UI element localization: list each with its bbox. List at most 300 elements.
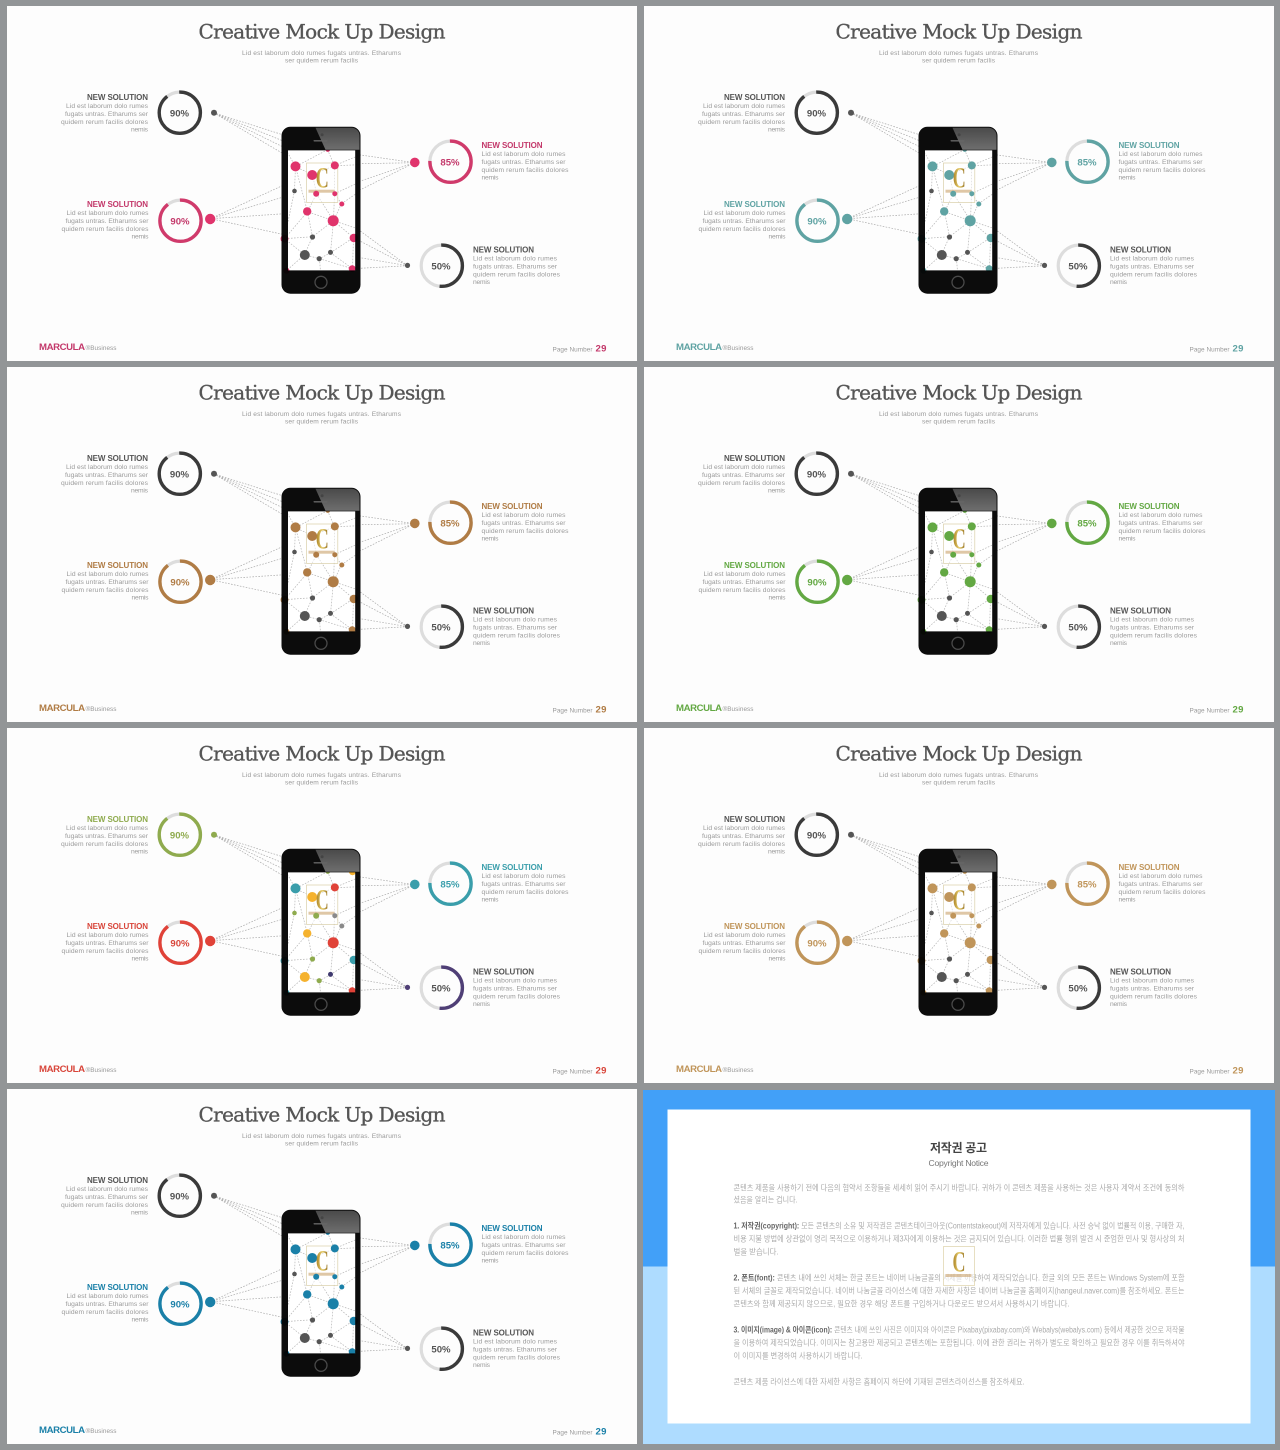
stat: right top 85%: fugats untras. Etharums ser xyxy=(1118,159,1203,166)
copyright subtitle: Copyright Notice xyxy=(928,1158,988,1168)
subtitle xyxy=(878,772,1038,787)
stat: bottom left 90%: Lid est laborum dolo rumes xyxy=(703,210,786,217)
stat: right bottom 50%: fugats untras. Etharums ser xyxy=(472,264,557,271)
page number: 29 xyxy=(595,705,606,716)
stat: bottom left 90%: Lid est laborum dolo rumes xyxy=(66,210,149,217)
stat: bottom left 90% xyxy=(698,922,852,964)
footer brand xyxy=(676,1064,753,1075)
stat: top left 90%: Lid est laborum dolo rumes xyxy=(702,103,785,110)
stat: right bottom 50%: NEW SOLUTION xyxy=(472,607,534,616)
footer brand: ®Business xyxy=(85,1066,116,1074)
subtitle: Lid est laborum dolo rumes fugats untras. Etharums xyxy=(242,50,401,57)
footer brand xyxy=(38,703,116,714)
subtitle: ser quidem rerum facilis xyxy=(284,419,358,426)
page number xyxy=(1189,705,1243,716)
stat: top left 90%: quidem rerum facilis dolores xyxy=(698,841,785,848)
title: Creative Mock Up Design xyxy=(198,1103,445,1127)
stat: right top 85%: 85% xyxy=(1077,158,1097,169)
phone mockup xyxy=(280,849,360,1016)
stat: bottom left 90%: 90% xyxy=(170,1300,190,1311)
stat: bottom left 90%: fugats untras. Etharums ser xyxy=(65,218,149,225)
page number: 29 xyxy=(595,1066,606,1077)
panel: slide 5 multicolour xyxy=(6,728,637,1083)
stat: top left 90%: NEW SOLUTION xyxy=(86,93,148,102)
stat: right bottom 50%: Lid est laborum dolo rumes xyxy=(1110,256,1194,263)
network wires xyxy=(847,835,1051,991)
stat: right top 85%: fugats untras. Etharums ser xyxy=(481,159,566,166)
stat: right top 85%: NEW SOLUTION xyxy=(481,863,542,872)
stat: right bottom 50%: 50% xyxy=(431,1345,451,1356)
logo watermark: C xyxy=(952,1245,965,1278)
page number: Page Number xyxy=(1189,1069,1230,1076)
stat: bottom left 90%: Lid est laborum dolo rumes xyxy=(66,932,149,939)
page number: 29 xyxy=(595,1427,606,1438)
stat: right bottom 50%: nemis xyxy=(1110,1001,1127,1008)
stat: right top 85%: 85% xyxy=(440,519,460,530)
stat: top left 90%: Lid est laborum dolo rumes xyxy=(66,1186,148,1193)
stat: right bottom 50%: fugats untras. Etharums ser xyxy=(472,1347,557,1354)
footer brand: ®Business xyxy=(85,1427,116,1435)
stat: right bottom 50%: quidem rerum facilis dolores xyxy=(1110,272,1197,279)
stat: right bottom 50%: quidem rerum facilis dolores xyxy=(472,994,560,1001)
page number: Page Number xyxy=(552,708,593,715)
stat: right bottom 50%: fugats untras. Etharums ser xyxy=(472,986,557,993)
logo watermark xyxy=(943,1245,974,1285)
stat: bottom left 90% xyxy=(61,200,215,242)
stat: bottom left 90%: 90% xyxy=(170,939,190,950)
stat: right bottom 50%: Lid est laborum dolo rumes xyxy=(1110,617,1194,624)
stat: right bottom 50% xyxy=(1041,245,1197,287)
stat: right top 85%: 85% xyxy=(440,158,460,169)
stat: right top 85%: 85% xyxy=(1077,519,1097,530)
stat: right top 85%: NEW SOLUTION xyxy=(481,141,542,150)
footer brand xyxy=(38,342,116,353)
stat: bottom left 90%: 90% xyxy=(807,578,827,589)
title: Creative Mock Up Design xyxy=(198,381,445,405)
stat: bottom left 90%: quidem rerum facilis dolores xyxy=(698,226,786,233)
page number: 29 xyxy=(595,344,606,355)
stat: bottom left 90% xyxy=(61,922,215,964)
stat: top left 90%: fugats untras. Etharums ser xyxy=(64,111,148,118)
page number: 29 xyxy=(1232,705,1243,716)
subtitle: Lid est laborum dolo rumes fugats untras. Etharums xyxy=(242,1133,401,1140)
subtitle xyxy=(242,50,401,65)
stat: right bottom 50%: NEW SOLUTION xyxy=(472,246,534,255)
notice section 3: 3. 이미지(image) & 아이콘(icon): 콘텐츠 내에 쓰인 사진은 이미지와 아이콘은 Pixabay(pixabay.com)와 Webalys(webalys.com) 등에서 제공한 것으로 저작물 xyxy=(733,1324,1184,1334)
page number xyxy=(552,1066,606,1077)
subtitle xyxy=(878,411,1038,426)
stat: right top 85%: Lid est laborum dolo rumes xyxy=(481,873,566,880)
stat: right bottom 50%: NEW SOLUTION xyxy=(1110,246,1171,255)
notice section 2: 콘텐츠와 함께 제공되지 않으므로, 필요한 경우 해당 폰트를 구입하거나 다운로드 받으셔서 사용하시기 바랍니다. xyxy=(733,1298,1069,1308)
stat: bottom left 90%: nemis xyxy=(131,1317,149,1324)
stat: right top 85%: nemis xyxy=(481,536,499,543)
stat: right bottom 50%: 50% xyxy=(1068,623,1088,634)
stat: right bottom 50%: 50% xyxy=(431,623,451,634)
subtitle xyxy=(878,50,1038,65)
stat: right top 85%: 85% xyxy=(440,880,460,891)
notice section 1: 비용 지불 방법에 상관없이 영리 목적으로 이용하거나 제3자에게 이용하는 것은 금지되어 있습니다. 이러한 법률 행위 발견 시 준엄한 민사 및 형사상의 처 xyxy=(733,1233,1184,1243)
stat: right top 85%: NEW SOLUTION xyxy=(1118,863,1179,872)
stat: top left 90%: nemis xyxy=(768,488,785,495)
stat: top left 90%: 90% xyxy=(806,831,826,842)
stat: top left 90%: nemis xyxy=(768,127,785,134)
stat: right top 85%: quidem rerum facilis dolores xyxy=(481,889,569,896)
stat: right bottom 50%: nemis xyxy=(472,1001,490,1008)
phone mockup xyxy=(917,127,997,294)
stat: top left 90%: nemis xyxy=(130,1210,148,1217)
stat: top left 90%: fugats untras. Etharums ser xyxy=(64,1194,148,1201)
stat: bottom left 90%: Lid est laborum dolo rumes xyxy=(66,1293,149,1300)
title: Creative Mock Up Design xyxy=(835,742,1082,766)
stat: bottom left 90%: quidem rerum facilis dolores xyxy=(698,587,786,594)
footer brand: ®Business xyxy=(85,344,116,352)
phone mockup: C xyxy=(315,1245,328,1278)
stat: right bottom 50%: 50% xyxy=(431,262,451,273)
notice intro: 셨음을 알리는 겁니다. xyxy=(733,1194,797,1204)
stat: bottom left 90%: Lid est laborum dolo rumes xyxy=(66,571,149,578)
title: Creative Mock Up Design xyxy=(198,742,445,766)
stat: bottom left 90% xyxy=(61,1283,215,1325)
subtitle xyxy=(242,411,401,426)
stat: right top 85%: Lid est laborum dolo rumes xyxy=(1118,873,1203,880)
footer brand: MARCULA xyxy=(676,342,722,353)
stat: bottom left 90%: NEW SOLUTION xyxy=(86,561,148,570)
stat: top left 90%: Lid est laborum dolo rumes xyxy=(66,825,148,832)
stat: right top 85%: fugats untras. Etharums ser xyxy=(1118,881,1203,888)
stat: top left 90%: nemis xyxy=(130,488,148,495)
stat: top left 90%: quidem rerum facilis dolores xyxy=(60,841,148,848)
stat: right bottom 50%: NEW SOLUTION xyxy=(472,1329,534,1338)
notice section 1: 벌을 받습니다. xyxy=(733,1246,778,1256)
subtitle: ser quidem rerum facilis xyxy=(284,1141,358,1148)
stat: right top 85%: nemis xyxy=(481,175,499,182)
subtitle: ser quidem rerum facilis xyxy=(284,58,358,65)
stat: bottom left 90%: fugats untras. Etharums ser xyxy=(702,940,786,947)
stat: bottom left 90%: nemis xyxy=(768,956,786,963)
stat: top left 90%: 90% xyxy=(169,831,189,842)
notice section 3: 을 이용하여 제작되었습니다. 이미지는 참고용만 제공되고 콘텐츠에는 포함됩니다. 이에 관한 권리는 귀하가 별도로 확인하고 필요한 경우 이를 취득하셔야 xyxy=(733,1337,1185,1347)
footer brand: ®Business xyxy=(722,344,753,352)
stat: right bottom 50%: 50% xyxy=(431,984,451,995)
stat: right top 85%: quidem rerum facilis dolores xyxy=(481,1250,569,1257)
stat: right top 85%: NEW SOLUTION xyxy=(481,502,542,511)
stat: top left 90%: quidem rerum facilis dolores xyxy=(698,480,785,487)
stat: top left 90%: quidem rerum facilis dolores xyxy=(60,119,148,126)
footer brand: ®Business xyxy=(85,705,116,713)
stat: top left 90%: fugats untras. Etharums ser xyxy=(702,833,785,840)
stat: right top 85%: quidem rerum facilis dolores xyxy=(481,528,569,535)
phone mockup: C xyxy=(315,523,328,556)
stat: right bottom 50%: fugats untras. Etharums ser xyxy=(1110,264,1194,271)
footer brand: MARCULA xyxy=(38,1064,85,1075)
stat: bottom left 90%: fugats untras. Etharums ser xyxy=(65,940,149,947)
panel: slide 4 green xyxy=(644,367,1274,722)
network wires xyxy=(847,113,1051,269)
stat: bottom left 90%: 90% xyxy=(807,939,827,950)
stat: right top 85%: Lid est laborum dolo rumes xyxy=(481,512,566,519)
stat: bottom left 90% xyxy=(61,561,215,603)
stat: right top 85%: nemis xyxy=(1118,536,1136,543)
stat: bottom left 90%: nemis xyxy=(131,956,149,963)
stat: right top 85%: nemis xyxy=(481,897,499,904)
stat: right bottom 50% xyxy=(1041,967,1197,1009)
subtitle xyxy=(242,1133,401,1148)
stat: right bottom 50% xyxy=(404,1328,560,1370)
notice section 2 xyxy=(733,1272,1185,1308)
stat: bottom left 90%: NEW SOLUTION xyxy=(86,922,148,931)
panel: slide 1 crimson xyxy=(6,6,637,361)
footer brand xyxy=(676,703,753,714)
stat: right bottom 50%: Lid est laborum dolo rumes xyxy=(472,617,557,624)
phone mockup xyxy=(280,127,360,294)
stat: top left 90%: NEW SOLUTION xyxy=(86,1176,148,1185)
stat: right bottom 50%: Lid est laborum dolo rumes xyxy=(472,1339,557,1346)
stat: right bottom 50%: nemis xyxy=(472,279,490,286)
stat: right bottom 50%: quidem rerum facilis dolores xyxy=(472,1355,560,1362)
footer brand: MARCULA xyxy=(676,703,722,714)
panel: copyright notice xyxy=(642,1090,1274,1444)
footer brand: ®Business xyxy=(722,705,753,713)
stat: right top 85%: Lid est laborum dolo rumes xyxy=(481,151,566,158)
stat: top left 90%: fugats untras. Etharums ser xyxy=(702,111,785,118)
stat: bottom left 90%: fugats untras. Etharums ser xyxy=(702,218,786,225)
stat: top left 90%: 90% xyxy=(806,109,826,120)
stat: top left 90%: NEW SOLUTION xyxy=(724,454,785,463)
subtitle: Lid est laborum dolo rumes fugats untras. Etharums xyxy=(878,772,1038,779)
stat: right bottom 50%: fugats untras. Etharums ser xyxy=(1110,625,1194,632)
stat: bottom left 90%: NEW SOLUTION xyxy=(86,1283,148,1292)
stat: right bottom 50%: 50% xyxy=(1068,984,1088,995)
notice section 1: 1. 저작권(copyright): 모든 콘텐츠의 소유 및 저작권은 콘텐츠테이크아웃(Contentstakeout)에 저작자에게 있습니다. 사전 승낙 없이 법률적 이용, 구매한 자, xyxy=(733,1220,1184,1230)
stat: top left 90%: fugats untras. Etharums ser xyxy=(64,833,148,840)
stat: top left 90% xyxy=(60,92,216,134)
stat: top left 90%: nemis xyxy=(130,849,148,856)
light blue lower band xyxy=(642,1266,1274,1444)
stat: bottom left 90%: Lid est laborum dolo rumes xyxy=(703,932,786,939)
page number: 29 xyxy=(1232,1066,1243,1077)
stat: bottom left 90%: quidem rerum facilis dolores xyxy=(61,587,149,594)
network wires xyxy=(847,474,1051,630)
stat: right bottom 50%: 50% xyxy=(1068,262,1088,273)
stat: bottom left 90% xyxy=(698,200,852,242)
stat: top left 90%: NEW SOLUTION xyxy=(86,454,148,463)
stat: top left 90%: fugats untras. Etharums ser xyxy=(64,472,148,479)
stat: right bottom 50%: fugats untras. Etharums ser xyxy=(1110,986,1194,993)
phone mockup xyxy=(917,488,997,655)
stat: right bottom 50% xyxy=(404,245,560,287)
stat: right bottom 50%: quidem rerum facilis dolores xyxy=(1110,994,1197,1001)
network wires xyxy=(210,835,414,991)
stat: right top 85%: NEW SOLUTION xyxy=(1118,502,1179,511)
notice section 2: 된 서체의 글꼴로 제작되었습니다. 네이버 나눔글꼴 라이선스에 대한 자세한 사항은 네이버 나눔글꼴 홈페이지(hangeul.naver.com)를 참조하세요. 폰트는 xyxy=(733,1285,1184,1295)
stat: right top 85%: 85% xyxy=(440,1241,460,1252)
stat: right top 85%: quidem rerum facilis dolores xyxy=(481,167,569,174)
page number: 29 xyxy=(1232,344,1243,355)
phone mockup xyxy=(280,1210,360,1377)
phone mockup: C xyxy=(952,523,965,556)
stat: bottom left 90%: quidem rerum facilis dolores xyxy=(61,226,149,233)
stat: top left 90%: NEW SOLUTION xyxy=(724,93,785,102)
white notice card xyxy=(667,1109,1250,1423)
network wires xyxy=(210,474,414,630)
subtitle: ser quidem rerum facilis xyxy=(922,58,995,65)
footer brand: MARCULA xyxy=(38,1425,85,1436)
subtitle: ser quidem rerum facilis xyxy=(922,419,995,426)
stat: bottom left 90%: nemis xyxy=(768,595,786,602)
notice intro: 콘텐츠 제품을 사용하기 전에 다음의 협약서 조항들을 세세히 읽어 주시기 바랍니다. 귀하가 이 콘텐츠 제품을 사용하는 것은 사용자 계약서 조건에 동의하 xyxy=(733,1182,1185,1192)
notice section 2: 2. 폰트(font): 콘텐츠 내에 쓰인 서체는 한글 폰트는 네이버 나눔글꼴의 서체를 이용하여 제작되었습니다. 한글 외의 모든 폰트는 Windows System에 포함 xyxy=(733,1272,1185,1282)
stat: bottom left 90%: quidem rerum facilis dolores xyxy=(698,948,786,955)
stat: right top 85%: nemis xyxy=(481,1258,499,1265)
stat: top left 90%: 90% xyxy=(169,109,189,120)
footer brand xyxy=(38,1064,116,1075)
stat: right bottom 50%: nemis xyxy=(1110,279,1127,286)
page number xyxy=(1189,1066,1243,1077)
footer brand xyxy=(38,1425,116,1436)
stat: top left 90% xyxy=(698,453,854,495)
notice intro xyxy=(733,1182,1185,1204)
stat: top left 90%: Lid est laborum dolo rumes xyxy=(702,464,785,471)
stat: top left 90% xyxy=(60,453,216,495)
stat: right bottom 50%: NEW SOLUTION xyxy=(472,968,534,977)
footer brand: MARCULA xyxy=(38,703,85,714)
stat: bottom left 90%: nemis xyxy=(768,234,786,241)
stat: bottom left 90%: nemis xyxy=(131,234,149,241)
stat: right top 85%: fugats untras. Etharums ser xyxy=(481,520,566,527)
phone mockup: C xyxy=(315,162,328,195)
page number xyxy=(552,705,606,716)
stat: right bottom 50%: NEW SOLUTION xyxy=(1110,968,1171,977)
stat: right top 85% xyxy=(1046,863,1206,905)
stat: bottom left 90%: nemis xyxy=(131,595,149,602)
stat: right bottom 50%: Lid est laborum dolo rumes xyxy=(472,978,557,985)
page number: Page Number xyxy=(1189,708,1230,715)
panel: slide 6 tan xyxy=(644,728,1274,1083)
panel: slide 3 brown xyxy=(6,367,637,722)
stat: right top 85%: fugats untras. Etharums ser xyxy=(481,881,566,888)
stat: bottom left 90%: 90% xyxy=(170,217,190,228)
footer brand: MARCULA xyxy=(676,1064,722,1075)
stat: bottom left 90%: NEW SOLUTION xyxy=(724,561,785,570)
stat: bottom left 90%: fugats untras. Etharums ser xyxy=(65,579,149,586)
stat: right top 85% xyxy=(1046,502,1206,544)
stat: right bottom 50%: nemis xyxy=(472,640,490,647)
stat: right top 85% xyxy=(410,1224,569,1266)
phone mockup xyxy=(280,488,360,655)
subtitle: ser quidem rerum facilis xyxy=(284,780,358,787)
stat: right bottom 50%: nemis xyxy=(1110,640,1127,647)
stat: top left 90%: 90% xyxy=(806,470,826,481)
stat: right bottom 50%: nemis xyxy=(472,1362,490,1369)
phone mockup xyxy=(917,849,997,1016)
stat: right top 85% xyxy=(410,502,569,544)
page number xyxy=(552,344,606,355)
notice closing line: 콘텐츠 제품 라이선스에 대한 자세한 사항은 홈페이지 하단에 기재된 콘텐츠라이선스를 참조하세요. xyxy=(733,1376,1024,1386)
subtitle: Lid est laborum dolo rumes fugats untras. Etharums xyxy=(242,772,401,779)
stat: right bottom 50%: quidem rerum facilis dolores xyxy=(1110,633,1197,640)
stat: bottom left 90%: 90% xyxy=(170,578,190,589)
phone mockup: C xyxy=(315,884,328,917)
stat: top left 90%: nemis xyxy=(130,127,148,134)
notice section 1 xyxy=(733,1220,1184,1256)
stat: right top 85%: Lid est laborum dolo rumes xyxy=(1118,151,1203,158)
stat: bottom left 90%: NEW SOLUTION xyxy=(86,200,148,209)
stat: right top 85%: quidem rerum facilis dolores xyxy=(1118,167,1206,174)
copyright heading: 저작권 공고 xyxy=(930,1140,986,1154)
notice section 3: 이 이미지를 변경하여 사용하시기 바랍니다. xyxy=(733,1350,862,1360)
stat: right bottom 50%: fugats untras. Etharums ser xyxy=(472,625,557,632)
stat: right bottom 50% xyxy=(404,606,560,648)
subtitle: Lid est laborum dolo rumes fugats untras. Etharums xyxy=(878,50,1038,57)
subtitle: Lid est laborum dolo rumes fugats untras. Etharums xyxy=(878,411,1038,418)
stat: right bottom 50% xyxy=(1041,606,1197,648)
stat: right bottom 50%: quidem rerum facilis dolores xyxy=(472,272,560,279)
stat: right top 85% xyxy=(410,863,569,905)
panel: slide 2 teal xyxy=(644,6,1274,361)
stat: right top 85%: NEW SOLUTION xyxy=(481,1224,542,1233)
stat: bottom left 90%: 90% xyxy=(807,217,827,228)
stat: top left 90%: Lid est laborum dolo rumes xyxy=(66,464,148,471)
title: Creative Mock Up Design xyxy=(835,381,1082,405)
stat: right top 85%: quidem rerum facilis dolores xyxy=(1118,528,1206,535)
stat: right top 85%: NEW SOLUTION xyxy=(1118,141,1179,150)
stat: top left 90%: 90% xyxy=(169,470,189,481)
page number: Page Number xyxy=(552,347,593,354)
stat: right top 85%: fugats untras. Etharums ser xyxy=(1118,520,1203,527)
stat: bottom left 90%: Lid est laborum dolo rumes xyxy=(703,571,786,578)
stat: right top 85%: nemis xyxy=(1118,897,1136,904)
notice section 3 xyxy=(733,1324,1185,1360)
stat: top left 90%: nemis xyxy=(768,849,785,856)
stat: right top 85%: Lid est laborum dolo rumes xyxy=(481,1234,566,1241)
stat: right bottom 50%: quidem rerum facilis dolores xyxy=(472,633,560,640)
stat: top left 90%: NEW SOLUTION xyxy=(724,815,785,824)
page number: Page Number xyxy=(552,1069,593,1076)
stat: top left 90%: quidem rerum facilis dolores xyxy=(60,480,148,487)
stat: top left 90% xyxy=(698,92,854,134)
phone mockup: C xyxy=(952,162,965,195)
footer brand: ®Business xyxy=(722,1066,753,1074)
stat: top left 90%: 90% xyxy=(169,1192,189,1203)
stat: top left 90%: fugats untras. Etharums ser xyxy=(702,472,785,479)
stat: right top 85%: nemis xyxy=(1118,175,1136,182)
title: Creative Mock Up Design xyxy=(835,20,1082,44)
stat: right top 85%: Lid est laborum dolo rumes xyxy=(1118,512,1203,519)
page number: Page Number xyxy=(552,1430,593,1437)
stat: right bottom 50%: Lid est laborum dolo rumes xyxy=(472,256,557,263)
network wires xyxy=(210,113,414,269)
subtitle xyxy=(242,772,401,787)
page number: Page Number xyxy=(1189,347,1230,354)
phone mockup: C xyxy=(952,884,965,917)
stat: top left 90% xyxy=(698,814,854,856)
panel: slide 7 blue xyxy=(6,1089,637,1444)
stat: bottom left 90%: quidem rerum facilis dolores xyxy=(61,948,149,955)
stat: right top 85% xyxy=(410,141,569,183)
stat: bottom left 90%: NEW SOLUTION xyxy=(724,200,785,209)
stat: top left 90%: Lid est laborum dolo rumes xyxy=(702,825,785,832)
page number xyxy=(552,1427,606,1438)
stat: bottom left 90%: fugats untras. Etharums ser xyxy=(65,1301,149,1308)
stat: right bottom 50% xyxy=(404,967,560,1009)
stat: top left 90% xyxy=(60,814,216,856)
stat: right top 85% xyxy=(1046,141,1206,183)
stat: bottom left 90%: NEW SOLUTION xyxy=(724,922,785,931)
footer brand xyxy=(676,342,753,353)
title: Creative Mock Up Design xyxy=(198,20,445,44)
stat: bottom left 90%: quidem rerum facilis dolores xyxy=(61,1309,149,1316)
